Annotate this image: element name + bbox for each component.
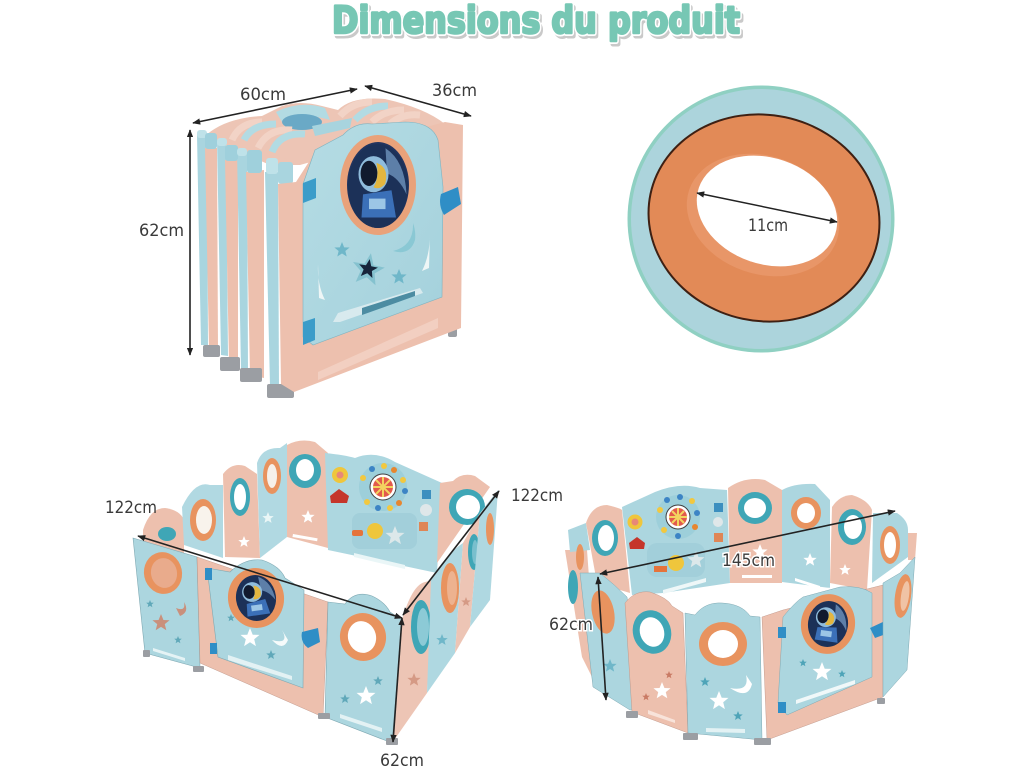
label: 36cm: 36cm <box>432 81 477 100</box>
stack feet <box>203 326 457 398</box>
front right panel <box>325 594 402 743</box>
folded playpen stack <box>197 98 463 398</box>
back wall panels <box>287 441 490 573</box>
pink front frame <box>278 122 463 392</box>
blue hinges <box>303 178 316 345</box>
front left panel <box>133 538 200 668</box>
round pen feet <box>626 698 885 745</box>
title: Dimensions du produit <box>332 0 740 42</box>
square playpen <box>133 441 498 745</box>
label: 122cm right: 122cm <box>511 486 563 505</box>
label: 62cm round pen: 62cm <box>549 615 593 634</box>
round playpen <box>565 479 917 745</box>
left front panel <box>580 573 640 710</box>
right front panel <box>883 557 915 697</box>
arrow: 62cm height <box>189 130 191 355</box>
ring opening <box>682 137 852 285</box>
arrow: 122cm side <box>403 491 499 615</box>
blue door panel <box>303 122 443 345</box>
door medallion <box>340 135 416 235</box>
frame recess <box>318 318 438 380</box>
label: 11cm: 11cm <box>748 216 788 235</box>
label: 145cm: 145cm <box>722 551 775 570</box>
arrow: 60cm width <box>193 89 357 123</box>
rear wall panels <box>565 479 917 687</box>
arrow: 62cm square pen height <box>393 618 402 742</box>
arrow: 145cm diameter <box>600 511 895 574</box>
title: Dimensions du produit <box>332 0 740 42</box>
label: 60cm: 60cm <box>240 85 286 104</box>
right wall panels <box>392 490 498 743</box>
back left wall panels <box>143 443 287 558</box>
pink front panel <box>625 592 688 733</box>
blue front panel <box>685 603 762 740</box>
label: 122cm left: 122cm <box>105 498 157 517</box>
floor <box>260 540 437 612</box>
floor opening <box>655 587 840 617</box>
blue latch <box>440 187 461 215</box>
arrow: 122cm front <box>138 536 402 618</box>
outer teal ring <box>628 86 894 352</box>
orange ring <box>628 92 900 344</box>
arrow: 36cm depth <box>365 86 471 116</box>
arrow: 62cm round pen height <box>598 577 606 700</box>
title: Dimensions du produit <box>334 2 742 45</box>
label: 62cm round pen: 62cm <box>549 615 593 634</box>
label: 145cm: 145cm <box>722 551 775 570</box>
stack top panel arcs <box>205 98 445 165</box>
door front panel <box>762 585 886 740</box>
round pen activity clock <box>656 494 700 539</box>
activity clock <box>359 463 408 511</box>
door star and moon cut-outs <box>318 223 430 322</box>
ring detail <box>628 86 900 352</box>
stack side columns <box>197 130 293 388</box>
square pen feet <box>143 650 398 745</box>
label: 62cm stack: 62cm <box>139 221 184 240</box>
front door panel <box>197 557 328 717</box>
arrow: 11cm opening <box>697 193 837 222</box>
